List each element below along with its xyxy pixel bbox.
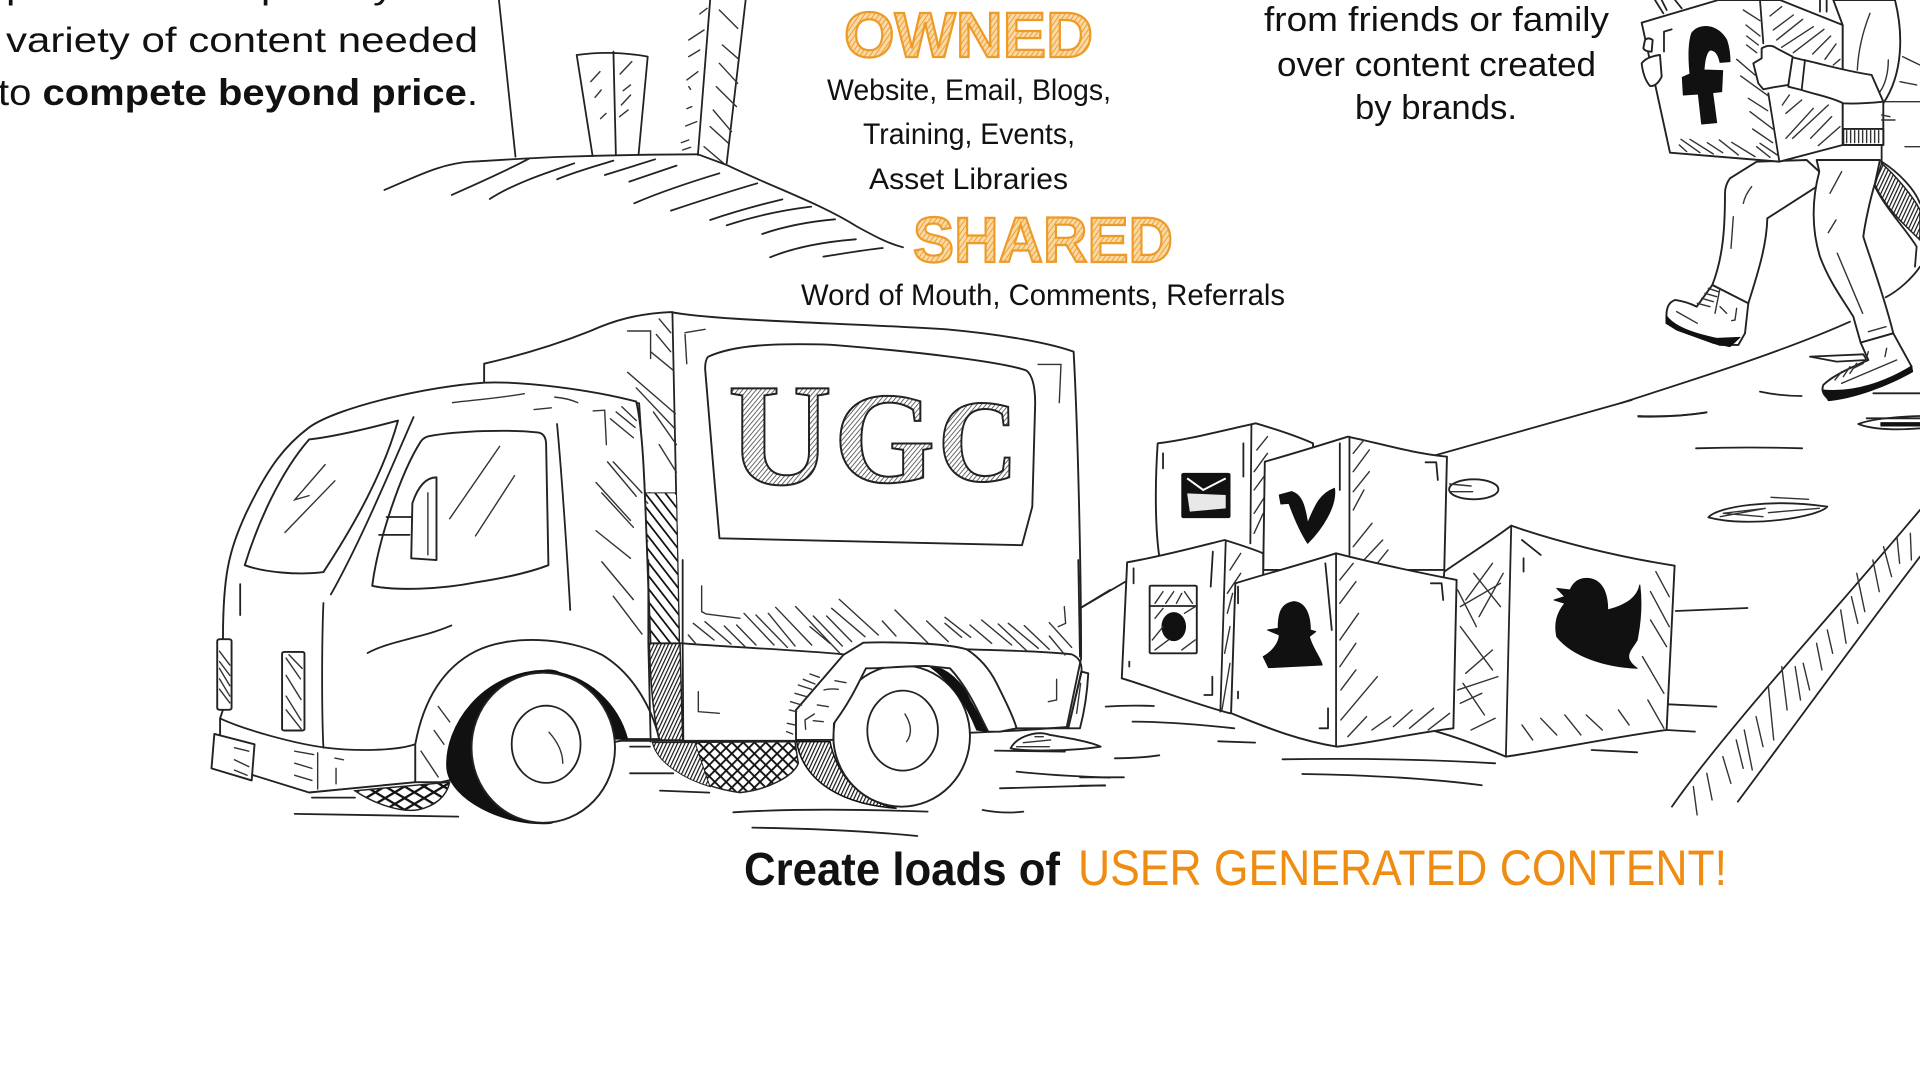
UGC logo on truck: U: [728, 354, 832, 516]
box: vimeo: [1263, 437, 1447, 570]
person upper body and box: [1642, 0, 1920, 163]
UGC logo on truck: C: [938, 376, 1018, 507]
ground marks under truck: [295, 798, 458, 817]
UGC logo on truck: G: [834, 367, 935, 511]
box: gmail: [1156, 423, 1313, 567]
ground marks and puddle: [630, 747, 1110, 836]
rear lamp: [1068, 672, 1088, 728]
hatched tail shape: [1875, 163, 1920, 240]
top-left text block: [0, 0, 478, 113]
top-right text block: over content created: [1277, 46, 1596, 84]
ground shadow mark: [1810, 354, 1867, 362]
social media boxes: [1122, 423, 1675, 757]
windshield: [245, 421, 398, 573]
heading: shared: SHARED: [913, 204, 1173, 276]
wing mirror: [379, 517, 414, 535]
box lower hatching: [688, 599, 1072, 655]
bottom tagline: [744, 840, 1727, 896]
heading: owned: OWNED: [844, 0, 1093, 71]
top-right text block: from friends or family: [1264, 1, 1609, 39]
road: [1080, 400, 1920, 815]
sleeve: [1788, 57, 1883, 104]
bumper: [220, 718, 415, 750]
bottom tagline: Create loads of: [744, 843, 1061, 895]
box: twitter: [1431, 526, 1675, 757]
front boot: [1822, 333, 1912, 400]
UGC logo on truck: [728, 354, 1018, 516]
rear arch shadow: [930, 667, 988, 732]
belt: [1843, 129, 1883, 145]
truck box hatching: [596, 319, 1061, 644]
front wheel: [447, 670, 628, 824]
owned channels list: Website, Email, Blogs,: [827, 74, 1111, 107]
box: snapchat: [1231, 553, 1457, 747]
lower dark strip: [649, 643, 683, 740]
background hill with building: [384, 0, 903, 257]
person carrying box: [1620, 0, 1920, 418]
icon: facebook f: [1682, 27, 1730, 124]
top-right text block: [1264, 1, 1609, 127]
top-right text block: by brands.: [1355, 89, 1517, 127]
building door: [577, 52, 648, 156]
underside shadow: [653, 742, 798, 793]
truck box sign panel: [705, 344, 1035, 545]
truck box body: [484, 312, 1081, 741]
underside shadow front: [355, 782, 450, 810]
back boot: [1666, 285, 1748, 345]
left hand: [1642, 38, 1662, 86]
front leg: [1814, 160, 1893, 343]
truck cab: [220, 382, 658, 792]
rear wheel: [833, 665, 970, 807]
right hand: [1753, 46, 1793, 89]
bottom tagline: USER GENERATED CONTENT!: [1078, 840, 1727, 896]
torso: [1833, 0, 1900, 145]
owned channels list: [827, 74, 1111, 196]
panel corner marks: [698, 586, 1066, 713]
box: instagram: [1122, 540, 1263, 713]
rear fender: [796, 642, 1017, 740]
carried box: [1642, 0, 1843, 162]
top-left text block: to compete beyond price .: [0, 72, 478, 113]
front wheel arch: [415, 640, 659, 782]
shared channels list: Word of Mouth, Comments, Referrals: [801, 279, 1285, 312]
top-left text block: variety of content needed: [6, 21, 478, 60]
back leg: [1712, 160, 1819, 303]
side marker and lights: [282, 652, 304, 730]
owned channels list: Asset Libraries: [869, 163, 1068, 196]
rear tire: [797, 742, 897, 808]
person legs and boots: [1620, 160, 1920, 418]
owned channels list: Training, Events,: [863, 118, 1075, 151]
side window: [372, 431, 548, 589]
truck rear section: [630, 560, 1110, 836]
delivery truck: [211, 312, 1081, 824]
truck box upper strip: [645, 493, 679, 644]
